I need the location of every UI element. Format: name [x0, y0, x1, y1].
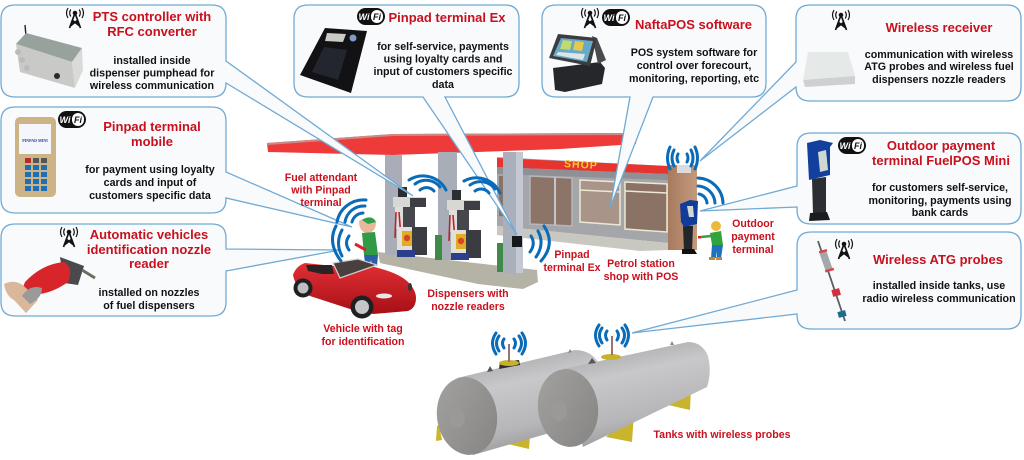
canopy	[267, 133, 637, 155]
icon: radio tower	[60, 227, 78, 247]
icon: wifi	[838, 137, 866, 154]
shop sign: SHOP	[564, 158, 598, 172]
label: outdoor payment terminal: payment	[731, 231, 775, 243]
icon: wifi: Wi	[359, 12, 370, 22]
device: mobile pinpad	[15, 117, 56, 197]
icon: radio tower	[66, 8, 84, 28]
description: customers specific data	[89, 190, 212, 202]
icon: wifi: Wi	[604, 13, 615, 23]
callout outline	[542, 5, 766, 208]
label: vehicle: for identification	[322, 336, 404, 348]
description: bank cards	[912, 207, 968, 219]
label: vehicle: Vehicle with tag	[323, 323, 403, 335]
red car	[293, 259, 416, 318]
callout outline	[700, 5, 1021, 161]
label: Pinpad terminal Ex: terminal Ex	[543, 262, 601, 274]
device: mobile pinpad: PINPAD MINI	[22, 138, 48, 143]
signal: fuel attendant	[337, 200, 366, 222]
callout outline	[1, 107, 352, 227]
signal: tank 1 probe	[492, 333, 526, 354]
description: dispenser pumphead for	[90, 68, 214, 80]
panel: nozzle reader	[1, 224, 340, 316]
panel: Outdoor payment terminal	[700, 133, 1021, 224]
signal: above dispenser 1	[409, 176, 446, 191]
description: input of customers specific	[374, 66, 513, 78]
panel: Wireless ATG probes	[632, 232, 1021, 333]
description: for payment using loyalty	[85, 164, 215, 176]
shop building	[497, 157, 697, 251]
panel: Wireless receiver	[700, 5, 1021, 161]
label: petrol station shop: shop with POS	[604, 271, 678, 283]
label: outdoor payment terminal: terminal	[732, 244, 774, 256]
panel: NaftaPOS software	[542, 5, 766, 208]
panel: Pinpad terminal Ex	[294, 5, 519, 235]
fuel attendant	[355, 217, 378, 266]
heading: identification nozzle	[87, 242, 211, 257]
device: black pinpad	[300, 28, 367, 93]
label: tanks: Tanks with wireless probes	[654, 429, 791, 441]
dispenser 1	[393, 187, 427, 257]
heading: NaftaPOS software	[635, 17, 752, 32]
label: dispensers: nozzle readers	[431, 301, 505, 313]
heading: Pinpad terminal Ex	[388, 10, 506, 25]
device: receiver box	[803, 52, 855, 87]
heading: Automatic vehicles	[90, 227, 208, 242]
description: dispensers nozzle readers	[872, 74, 1006, 86]
description: communication with wireless	[865, 49, 1013, 61]
heading: mobile	[131, 134, 173, 149]
heading: Outdoor payment	[887, 138, 996, 153]
device: fuel nozzle	[4, 257, 95, 313]
icon: radio tower	[832, 10, 850, 30]
description: installed on nozzles	[99, 287, 200, 299]
icon: wifi: Fi	[618, 13, 626, 23]
description: installed inside	[113, 55, 191, 67]
callout outline	[1, 5, 413, 196]
description: installed inside tanks, use	[873, 280, 1005, 292]
description: data	[432, 79, 455, 91]
pinpad terminal on column	[512, 236, 522, 247]
label: fuel attendant: terminal	[300, 197, 342, 209]
description: ATG probes and wireless fuel	[864, 61, 1014, 73]
label: outdoor payment terminal: Outdoor	[732, 218, 774, 230]
description: using loyalty cards and	[384, 54, 502, 66]
device: controller box	[15, 25, 83, 88]
tanks with probes	[432, 336, 710, 459]
description: of fuel dispensers	[103, 300, 195, 312]
label: dispensers: Dispensers with	[427, 288, 509, 300]
panel: PTS controller	[1, 5, 413, 196]
description: cards and input of	[104, 177, 197, 189]
description: monitoring, reporting, etc	[629, 73, 759, 85]
callout outline	[1, 224, 340, 316]
label: petrol station shop: Petrol station	[607, 258, 675, 270]
signal: wireless receiver on shop	[668, 147, 698, 169]
illustration: petrol station	[267, 133, 723, 318]
icon: wifi	[357, 8, 385, 25]
description: radio wireless communication	[862, 293, 1016, 305]
icon: wifi: Wi	[840, 141, 851, 151]
description: for self-service, payments	[377, 41, 509, 53]
device: POS terminal	[549, 34, 606, 92]
callout outline	[632, 232, 1021, 333]
description: monitoring, payments using	[868, 195, 1012, 207]
columns	[385, 152, 523, 273]
forecourt island	[378, 252, 538, 289]
label: Pinpad terminal Ex: Pinpad	[554, 249, 590, 261]
icon: wifi: Fi	[373, 12, 381, 22]
heading: RFC converter	[107, 24, 197, 39]
heading: reader	[129, 256, 169, 271]
signal: outdoor payment terminal	[698, 178, 723, 203]
heading: terminal FuelPOS Mini	[872, 153, 1010, 168]
tank 1	[432, 344, 602, 459]
icon: wifi: Fi	[854, 141, 862, 151]
customer at terminal	[698, 221, 723, 260]
icon: wifi: Wi	[60, 115, 71, 125]
device: ATG probe	[818, 241, 847, 321]
signal: tank 2 probe	[596, 325, 628, 346]
icon: wifi	[58, 111, 86, 128]
label: fuel attendant: with Pinpad	[290, 184, 351, 196]
label: fuel attendant: Fuel attendant	[285, 172, 358, 184]
icon: radio tower	[582, 8, 598, 28]
signal: Pinpad terminal Ex	[530, 226, 549, 261]
heading: Wireless ATG probes	[873, 252, 1003, 267]
panel: Pinpad terminal mobile	[1, 107, 352, 227]
callout outline	[294, 5, 519, 235]
heading: Pinpad terminal	[103, 119, 201, 134]
icon: wifi	[602, 9, 630, 26]
signal: vehicle tag	[332, 226, 349, 261]
tank 2	[533, 336, 710, 451]
description: POS system software for	[631, 47, 757, 59]
heading: Wireless receiver	[886, 20, 992, 35]
heading: PTS controller with	[93, 9, 211, 24]
outdoor payment terminal	[680, 200, 698, 254]
dispenser 2	[447, 190, 481, 260]
callout outline	[700, 133, 1021, 224]
device: FuelPOS Mini	[807, 140, 833, 221]
description: wireless communication	[89, 80, 214, 92]
signal: above dispenser 2	[464, 178, 500, 193]
icon: radio tower	[836, 239, 852, 259]
description: control over forecourt,	[637, 60, 751, 72]
icon: wifi: Fi	[74, 115, 82, 125]
description: for customers self-service,	[872, 182, 1008, 194]
